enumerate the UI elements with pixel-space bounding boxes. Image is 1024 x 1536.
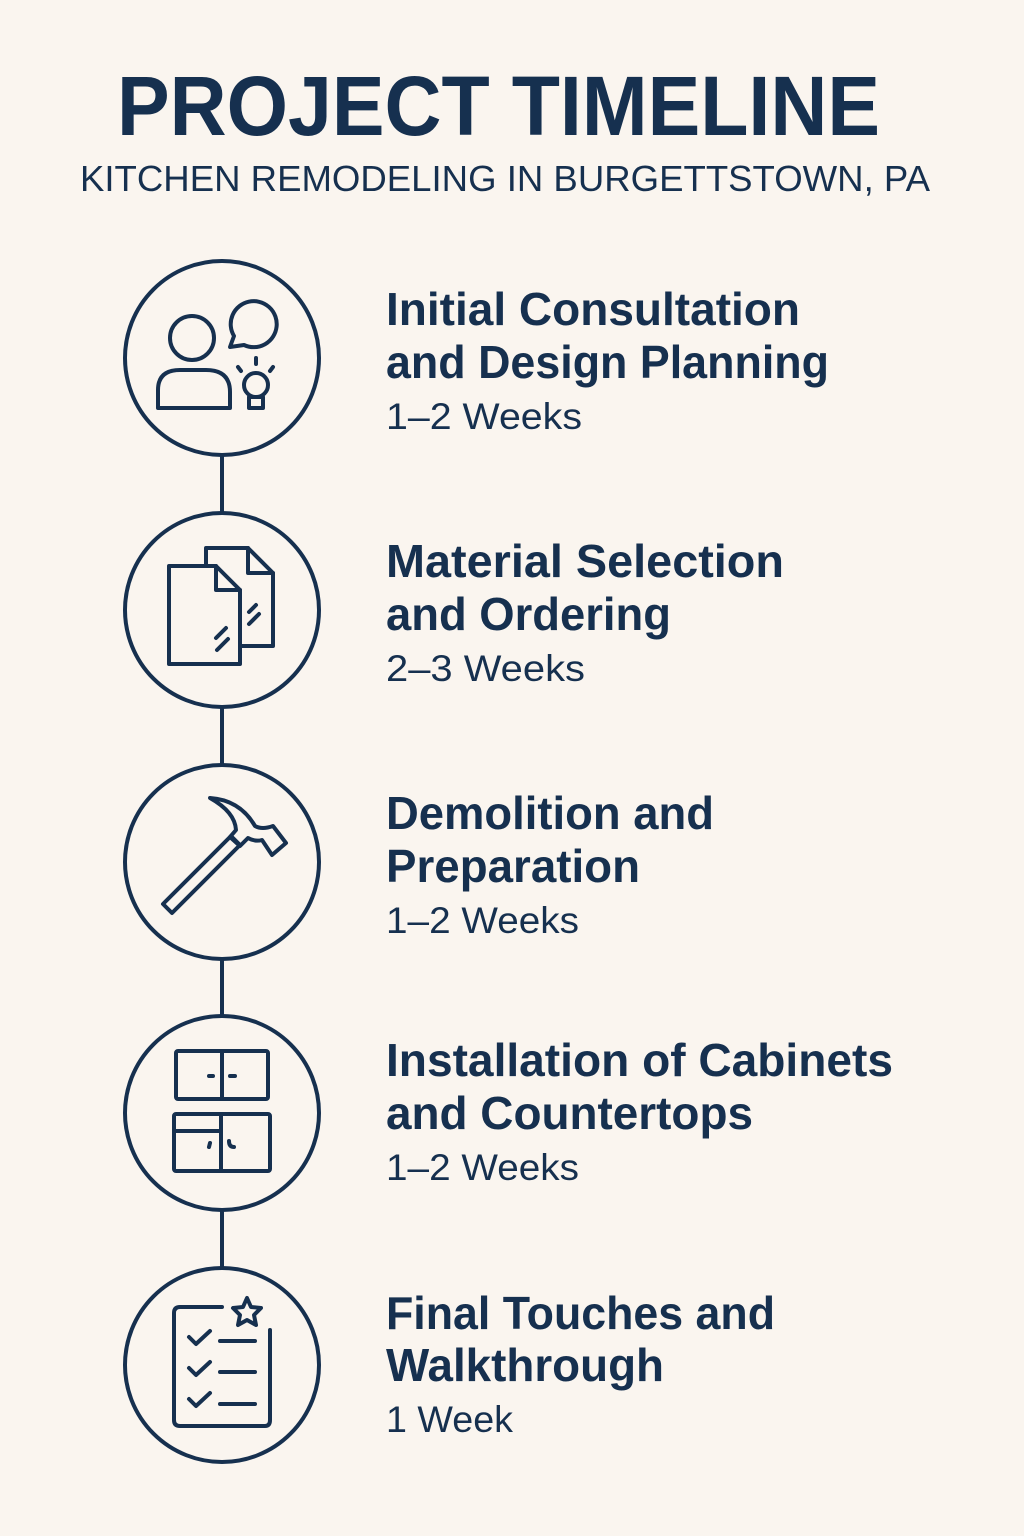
- text: step 1: [386, 283, 829, 437]
- step 4: installation: [125, 1016, 893, 1210]
- text: step 2: Material Selection: [386, 535, 784, 587]
- text: step 3: 1–2 Weeks: [386, 900, 579, 941]
- text: step 3: Preparation: [386, 840, 640, 892]
- text: step 5: Walkthrough: [386, 1339, 664, 1391]
- icon: cabinets: [125, 1016, 319, 1210]
- text: step 3: Demolition and: [386, 787, 714, 839]
- step 3: demolition: [125, 765, 714, 959]
- text: step 2: and Ordering: [386, 588, 671, 640]
- subtitle: KITCHEN REMODELING IN BURGETTSTOWN, PA: [80, 158, 930, 199]
- text: step 4: 1–2 Weeks: [386, 1147, 579, 1188]
- text: step 1: 1–2 Weeks: [386, 396, 582, 437]
- text: step 4: and Countertops: [386, 1087, 753, 1139]
- text: step 5: [386, 1287, 775, 1440]
- step 5: final touches: [125, 1268, 775, 1462]
- icon: hammer: [125, 765, 319, 959]
- text: step 5: 1 Week: [386, 1399, 513, 1440]
- text: step 2: [386, 535, 784, 689]
- step 1: consultation: [125, 261, 829, 455]
- icon: people and ideas: [125, 261, 319, 455]
- step 2: materials: [125, 513, 784, 707]
- text: step 1: Initial Consultation: [386, 283, 800, 335]
- text: step 5: Final Touches and: [386, 1287, 775, 1339]
- text: step 3: [386, 787, 714, 941]
- text: step 4: Installation of Cabinets: [386, 1034, 893, 1086]
- title: PROJECT TIMELINE: [117, 59, 880, 153]
- icon: documents: [125, 513, 319, 707]
- text: step 4: [386, 1034, 893, 1188]
- icon: checklist with star: [125, 1268, 319, 1462]
- text: step 1: and Design Planning: [386, 336, 829, 388]
- text: step 2: 2–3 Weeks: [386, 648, 585, 689]
